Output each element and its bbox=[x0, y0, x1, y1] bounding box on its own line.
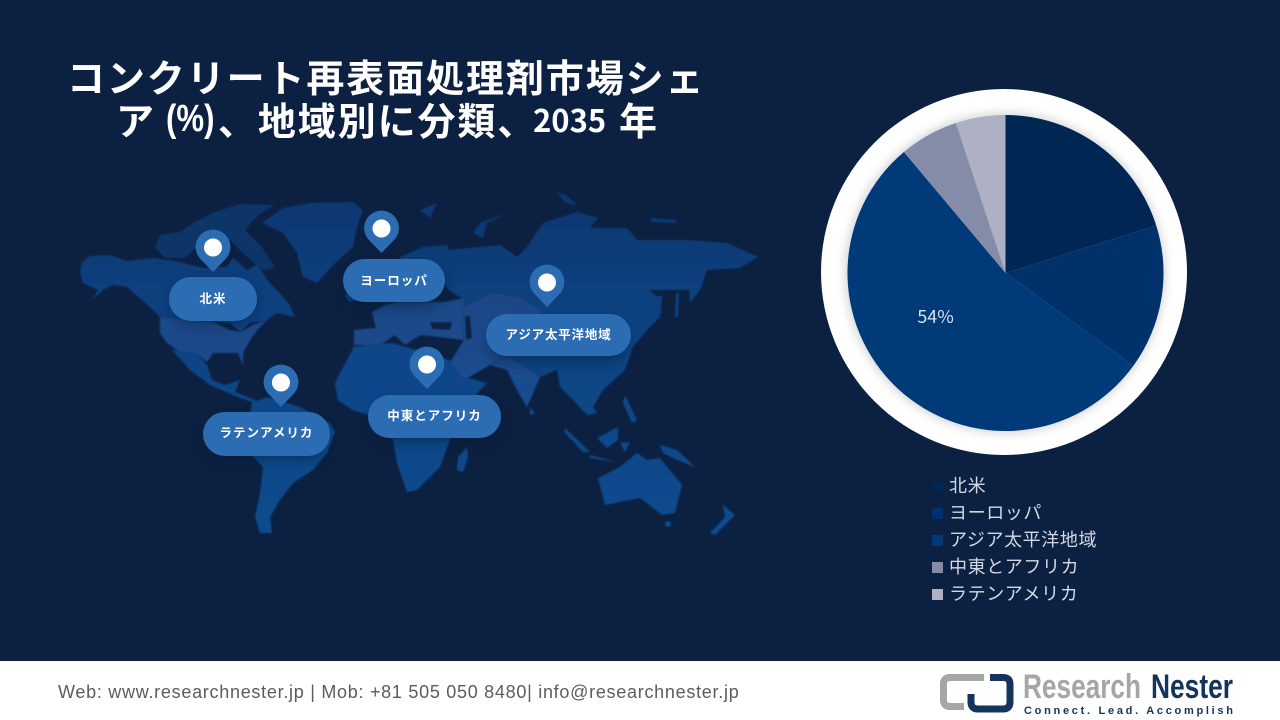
legend item: アジア太平洋地域 bbox=[932, 530, 1097, 550]
pin bbox=[364, 211, 399, 253]
pill bbox=[368, 395, 501, 438]
Greenland bbox=[262, 202, 363, 283]
Central Asia and Arabia bbox=[450, 293, 543, 380]
logo mark bbox=[944, 678, 1010, 709]
marker: アジア太平洋地域 bbox=[486, 265, 631, 361]
Madagascar bbox=[457, 447, 468, 472]
Russian Arctic islands bbox=[420, 193, 677, 238]
title: 年 bbox=[619, 91, 659, 146]
marker: 中東とアフリカ bbox=[368, 347, 501, 442]
slice: 北米 bbox=[1006, 115, 1156, 273]
footer bar bbox=[0, 661, 1280, 720]
legend item: ラテンアメリカ bbox=[932, 584, 1078, 604]
Europe bbox=[354, 298, 465, 345]
title: ア bbox=[116, 91, 156, 146]
Southeast Asia islands bbox=[530, 395, 695, 467]
label: 北米 bbox=[199, 291, 227, 306]
United States bbox=[160, 317, 267, 365]
logo name: Research bbox=[1023, 668, 1141, 706]
legend: ヨーロッパ bbox=[949, 503, 1042, 523]
pill bbox=[343, 259, 445, 302]
Australia bbox=[598, 453, 682, 515]
legend: ラテンアメリカ bbox=[949, 584, 1078, 604]
Africa south bbox=[385, 407, 464, 492]
slice: アジア太平洋地域 bbox=[847, 152, 1133, 431]
label: ラテンアメリカ bbox=[220, 426, 313, 440]
legend: アジア太平洋地域 bbox=[949, 530, 1097, 550]
Japan and Sakhalin bbox=[656, 293, 679, 317]
Mexico and Central America bbox=[172, 350, 270, 404]
pill bbox=[169, 277, 257, 321]
New Zealand bbox=[710, 505, 735, 535]
Tasmania bbox=[665, 521, 671, 527]
marker: ラテンアメリカ bbox=[203, 365, 330, 459]
legend item: ヨーロッパ bbox=[932, 503, 1042, 523]
slice: 中東とアフリカ bbox=[904, 123, 1006, 273]
label: アジア太平洋地域 bbox=[506, 327, 611, 342]
logo: Nester bbox=[1151, 668, 1233, 706]
Eurasia bbox=[440, 212, 758, 415]
pin bbox=[410, 347, 444, 389]
Scandinavia bbox=[400, 245, 450, 287]
label: 中東とアフリカ bbox=[387, 408, 482, 423]
South America bbox=[247, 397, 335, 533]
logo bbox=[940, 668, 1233, 717]
pin bbox=[530, 265, 564, 307]
pin bbox=[264, 365, 298, 407]
logo tagline: Connect. Lead. Accomplish bbox=[1024, 705, 1233, 717]
title: 2035 bbox=[533, 96, 606, 141]
pin bbox=[196, 230, 230, 272]
legend: 北米 bbox=[949, 476, 986, 496]
white ring bbox=[821, 89, 1187, 455]
legend bbox=[932, 476, 1097, 604]
title: 、地域別に分類、 bbox=[218, 91, 537, 146]
value label: 54% bbox=[917, 303, 954, 329]
marker: ヨーロッパ bbox=[343, 211, 445, 306]
Arctic islands bbox=[155, 204, 275, 270]
title: (%) bbox=[166, 98, 214, 140]
title: コンクリート再表面処理剤市場シェ bbox=[67, 48, 705, 103]
land masses bbox=[80, 193, 758, 535]
contact details: Web: www.researchnester.jp | Mob: +81 505 050 8480| info@researchnester.jp bbox=[58, 682, 739, 702]
pill bbox=[203, 412, 330, 456]
marker: 北米 bbox=[169, 230, 257, 324]
North Africa bbox=[335, 343, 487, 420]
title bbox=[67, 48, 705, 146]
Black Sea and Caspian bbox=[430, 316, 472, 340]
India bbox=[490, 356, 540, 407]
legend: 中東とアフリカ bbox=[949, 557, 1079, 577]
Canada and Alaska bbox=[80, 255, 295, 332]
pie chart bbox=[821, 89, 1187, 455]
legend item: 中東とアフリカ bbox=[932, 557, 1079, 577]
label: ヨーロッパ bbox=[360, 274, 428, 288]
pill bbox=[486, 314, 631, 356]
Iceland bbox=[345, 291, 363, 302]
legend item: 北米 bbox=[932, 476, 986, 496]
slice: ヨーロッパ bbox=[1006, 226, 1164, 366]
slice: ラテンアメリカ bbox=[956, 115, 1006, 273]
